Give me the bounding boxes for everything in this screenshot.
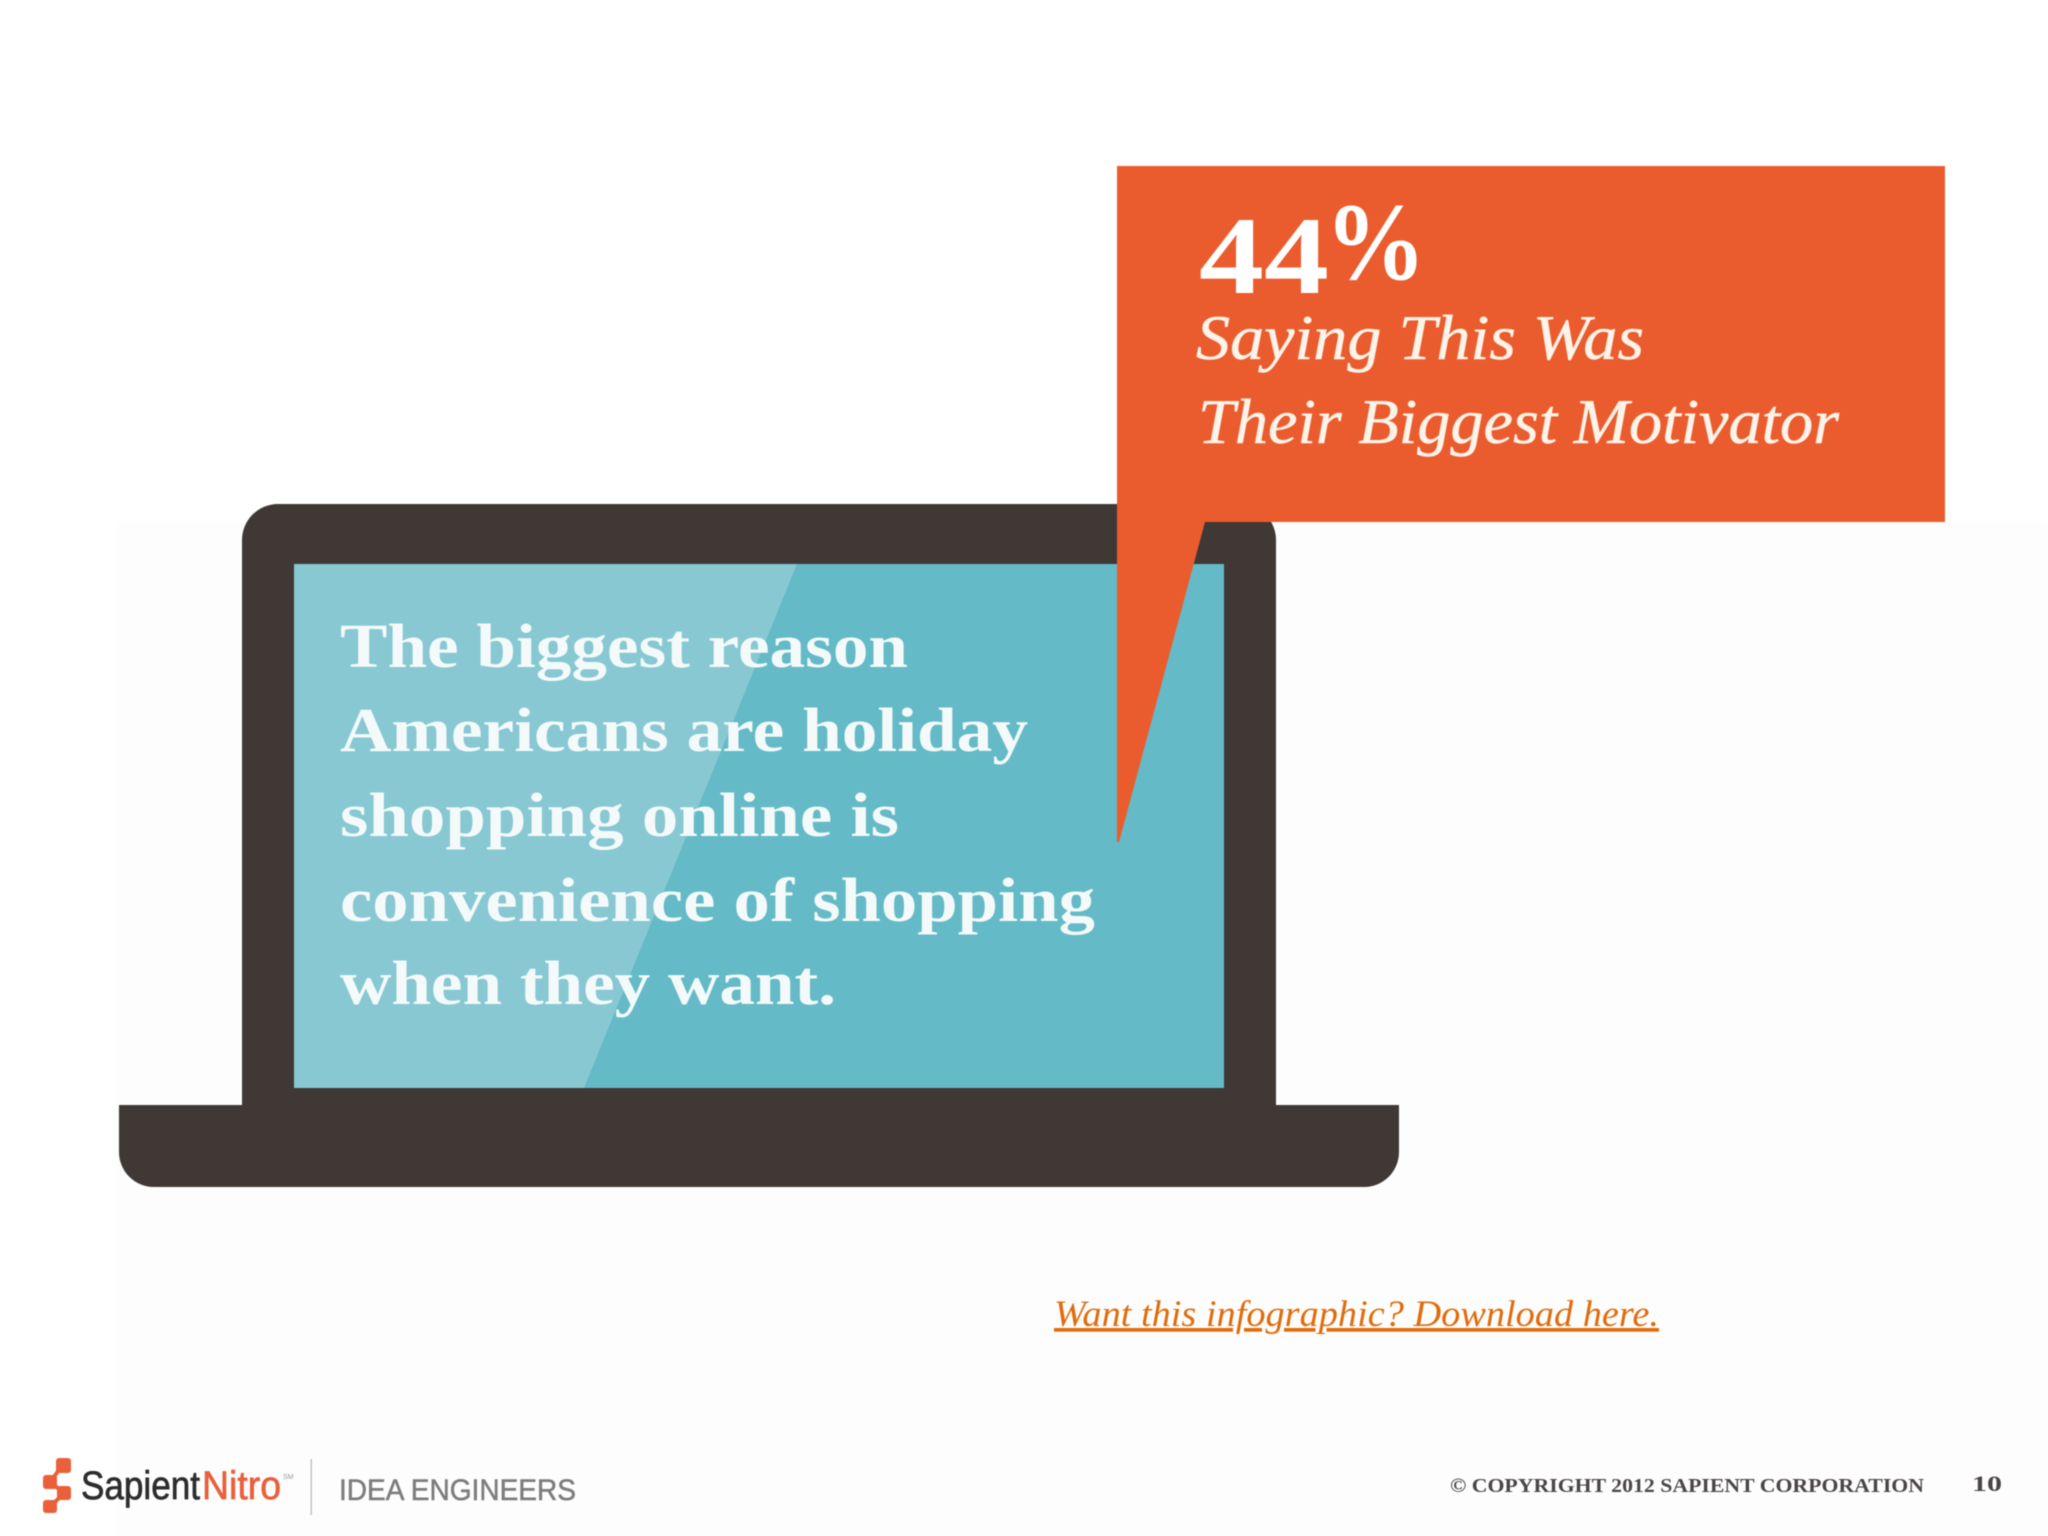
callout caption: Their Biggest Motivator: [1198, 386, 1840, 457]
screen text: biggest reason: Americans are holiday: [340, 697, 1028, 765]
copyright notice: © COPYRIGHT 2012 SAPIENT CORPORATION: [1450, 1475, 1925, 1497]
screen text: biggest reason: convenience of shopping: [340, 867, 1095, 935]
logo wordmark: Sapient: [81, 1464, 200, 1508]
screen glare: [294, 564, 797, 1088]
page number: 10: [1972, 1471, 2002, 1496]
screen text: biggest reason: shopping online is: [340, 782, 899, 850]
tagline: IDEA ENGINEERS: IDEA ENGINEERS: [339, 1474, 576, 1507]
callout caption: [1196, 302, 1840, 457]
logo: SapientNitro: Nitro: [202, 1464, 281, 1508]
laptop base: [119, 1105, 1399, 1187]
screen text: biggest reason: The biggest reason: [340, 613, 908, 681]
laptop screen: [294, 564, 1224, 1088]
callout statistic: 44%: %: [1325, 181, 1426, 303]
callout caption: Saying This Was: [1196, 302, 1644, 373]
screen text: biggest reason: [340, 613, 1095, 1018]
callout speech bubble: [1117, 166, 1945, 842]
callout statistic: 44%: [1199, 181, 1426, 318]
callout statistic: 44%: 44: [1199, 195, 1329, 318]
logo divider: [310, 1459, 312, 1515]
laptop illustration: [119, 504, 1399, 1187]
logo: SapientNitro: SM: [283, 1474, 294, 1481]
logo icon: [43, 1458, 71, 1513]
screen text: biggest reason: when they want.: [340, 950, 836, 1018]
laptop lid: [242, 504, 1276, 1110]
download link: Want this infographic? Download here.: [1054, 1294, 1659, 1335]
logo: SapientNitro: [43, 1458, 294, 1513]
